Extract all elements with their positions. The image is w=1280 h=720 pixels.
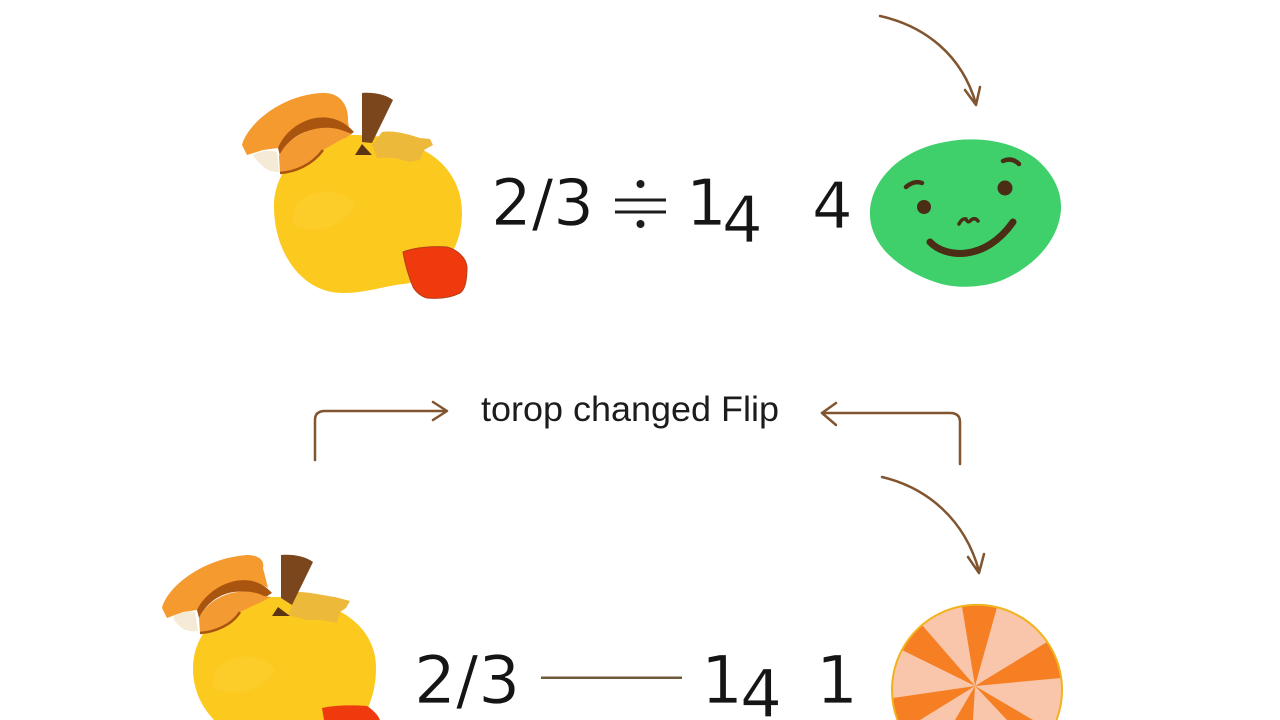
line: connector between fractions	[541, 676, 682, 679]
arrow: lower curved arrow to orange	[882, 477, 984, 573]
icon: green smiling face	[870, 139, 1061, 287]
equation: top division	[491, 167, 853, 258]
arrow: left elbow arrow pointing to label	[315, 402, 447, 460]
equation: top division: 1	[686, 167, 727, 241]
equation: top division: 4	[722, 184, 763, 258]
equation: bottom line: 1	[816, 642, 858, 719]
label: flip caption: torop changed Flip	[481, 390, 779, 429]
icon: orange slice	[892, 605, 1062, 720]
equation: bottom line	[414, 642, 858, 720]
arrow: top curved arrow to green face	[880, 16, 980, 105]
icon: bottom apple	[162, 555, 380, 720]
equation: top division: 4	[812, 170, 853, 244]
equation: bottom line: 2/3	[414, 642, 520, 719]
icon: division sign	[615, 180, 666, 228]
icon: top apple	[242, 93, 467, 298]
arrow: right elbow arrow pointing to label	[822, 403, 960, 464]
equation: top division: 2/3	[491, 167, 594, 241]
equation: bottom line: 1	[701, 642, 743, 719]
